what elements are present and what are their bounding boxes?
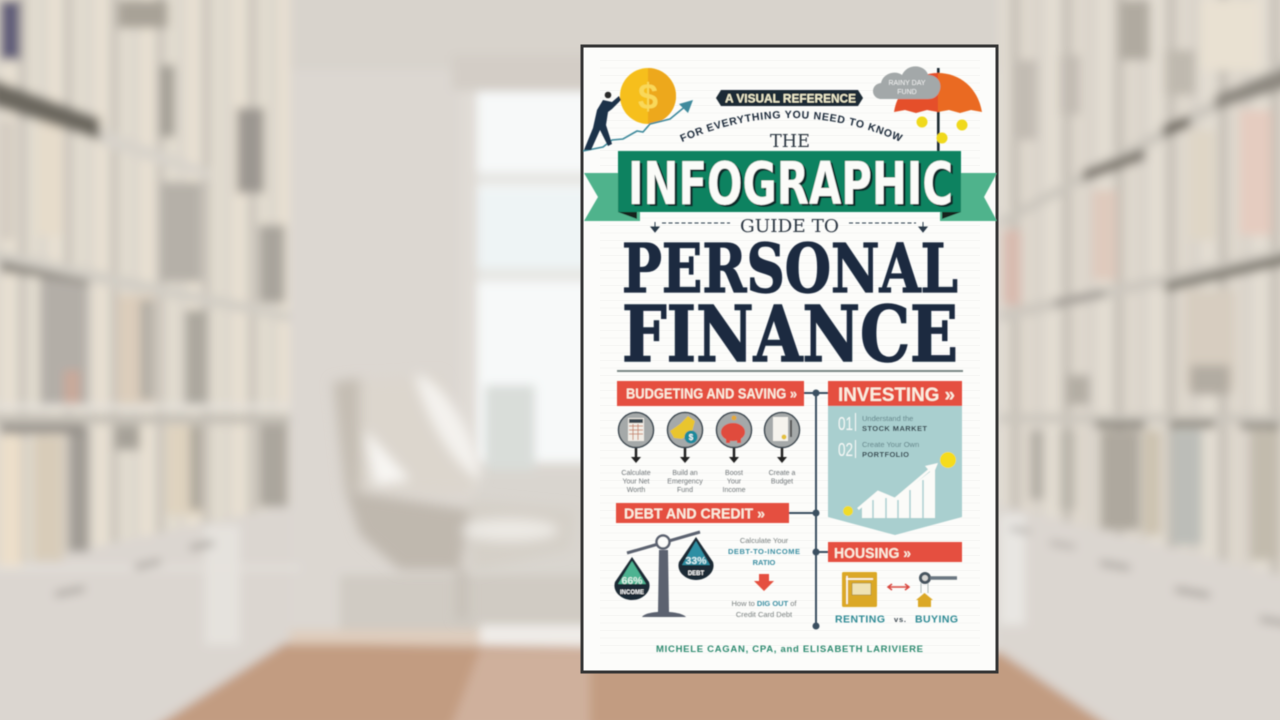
- panel: budgeting and saving: [617, 381, 804, 494]
- guide to: GUIDE TO: [740, 217, 839, 237]
- dig out text: [731, 599, 797, 619]
- cloud: [873, 66, 940, 99]
- right shelves: [1000, 52, 1280, 228]
- icon labels: [621, 470, 796, 494]
- panel: debt and credit: [614, 503, 800, 619]
- ribbon banner: [584, 149, 997, 221]
- step 02: Create Your Own: [862, 440, 919, 449]
- step 01: 01: [838, 414, 853, 434]
- icon: red down arrow: [754, 574, 774, 591]
- heading: [617, 381, 804, 406]
- debt ratio text: DEBT-TO-INCOME: [728, 547, 800, 556]
- badge: a visual reference: [716, 90, 863, 106]
- umbrella pole: [937, 68, 940, 152]
- badge: a visual reference: A VISUAL REFERENCE: [725, 94, 856, 106]
- rising arrow: [583, 100, 693, 151]
- left lower cabinets: [0, 505, 290, 720]
- teal shield: [828, 406, 962, 535]
- panel: investing: [828, 381, 962, 535]
- icon labels: Budget: [771, 478, 793, 486]
- umbrella canopy: [894, 73, 938, 113]
- heading: [616, 503, 789, 523]
- icon labels: Emergency: [667, 478, 703, 486]
- icon: rainy day fund umbrella: [873, 66, 982, 152]
- debt weight: DEBT: [688, 571, 704, 577]
- icon labels: Boost: [725, 470, 743, 477]
- icon: piggy bank: [716, 412, 752, 463]
- right lower cabinets: [1000, 505, 1280, 720]
- housing labels: [835, 614, 958, 626]
- infographic wordmark: INFOGRAPHIC: [630, 151, 956, 220]
- infographic wordmark: [628, 149, 956, 220]
- step 01: STOCK MARKET: [862, 424, 927, 433]
- authors: MICHELE CAGAN, CPA, and ELISABETH LARIVIERE: [656, 644, 923, 655]
- businessman: [584, 96, 621, 150]
- step 02: PORTFOLIO: [862, 450, 909, 459]
- icon: man pushing dollar coin: [583, 68, 693, 151]
- icon: balance scale: [614, 532, 714, 617]
- panel: housing: [828, 542, 962, 626]
- guide to: [651, 217, 927, 237]
- icon: double arrow: [888, 584, 909, 590]
- left shelves: [0, 78, 100, 140]
- debt ratio text: [728, 536, 800, 567]
- icon labels: Your: [727, 478, 742, 486]
- finance: FINANCE: [622, 290, 958, 380]
- step 02: [838, 440, 919, 460]
- icon: budget document: [764, 412, 800, 463]
- heading: DEBT AND CREDIT »: [624, 506, 765, 522]
- cloud: FUND: [897, 89, 917, 96]
- icon labels: Fund: [677, 487, 693, 494]
- icon labels: Income: [723, 487, 746, 494]
- timeline connector: [789, 390, 828, 630]
- left books: [0, 0, 290, 572]
- income weight: [614, 557, 650, 600]
- cover page frame: [582, 46, 997, 672]
- housing labels: RENTING: [835, 614, 885, 626]
- heading: HOUSING »: [834, 546, 911, 562]
- heading: INVESTING »: [838, 385, 955, 406]
- right handles: [1010, 526, 1030, 534]
- income weight: 66%: [621, 575, 643, 587]
- debt ratio text: RATIO: [753, 558, 776, 567]
- curved subtitle: FOR EVERYTHING YOU NEED TO KNOW: [679, 110, 904, 142]
- icon labels: Worth: [627, 487, 645, 494]
- right books: [1000, 0, 1280, 580]
- chair: [333, 378, 365, 490]
- step 01: [838, 413, 927, 434]
- income weight: INCOME: [620, 590, 644, 596]
- housing labels: vs.: [894, 615, 906, 624]
- icon labels: Build an: [672, 470, 698, 477]
- floor: [148, 643, 1115, 720]
- icon labels: Create a: [769, 470, 796, 477]
- window: [452, 55, 602, 90]
- dig out text: Credit Card Debt: [736, 610, 793, 619]
- personal: PERSONAL: [622, 229, 958, 308]
- icon: calculator: [618, 412, 654, 463]
- icon: emergency fund: $: [689, 433, 694, 442]
- icon: emergency fund: [668, 412, 702, 463]
- housing labels: BUYING: [915, 614, 958, 626]
- gold coin: $: [638, 76, 658, 117]
- dig out text: How to DIG OUT of: [731, 599, 797, 608]
- step 02: 02: [838, 440, 853, 460]
- step 01: Understand the: [862, 414, 913, 423]
- infographic wordmark: INFOGRAPHIC: [628, 149, 953, 218]
- icon labels: Your Net: [623, 478, 650, 486]
- cloud: RAINY DAY: [888, 80, 926, 87]
- left handles: [55, 586, 85, 597]
- heading: BUDGETING AND SAVING »: [626, 386, 797, 402]
- icon: key and house: [916, 574, 957, 607]
- the: THE: [770, 132, 810, 152]
- icon: for rent sign: [842, 572, 877, 607]
- debt ratio text: Calculate Your: [740, 536, 789, 545]
- debt weight: 33%: [685, 555, 707, 567]
- icon labels: Calculate: [621, 470, 651, 477]
- debt weight: [678, 537, 714, 580]
- falling coins: [916, 116, 968, 144]
- growth chart: [843, 452, 956, 518]
